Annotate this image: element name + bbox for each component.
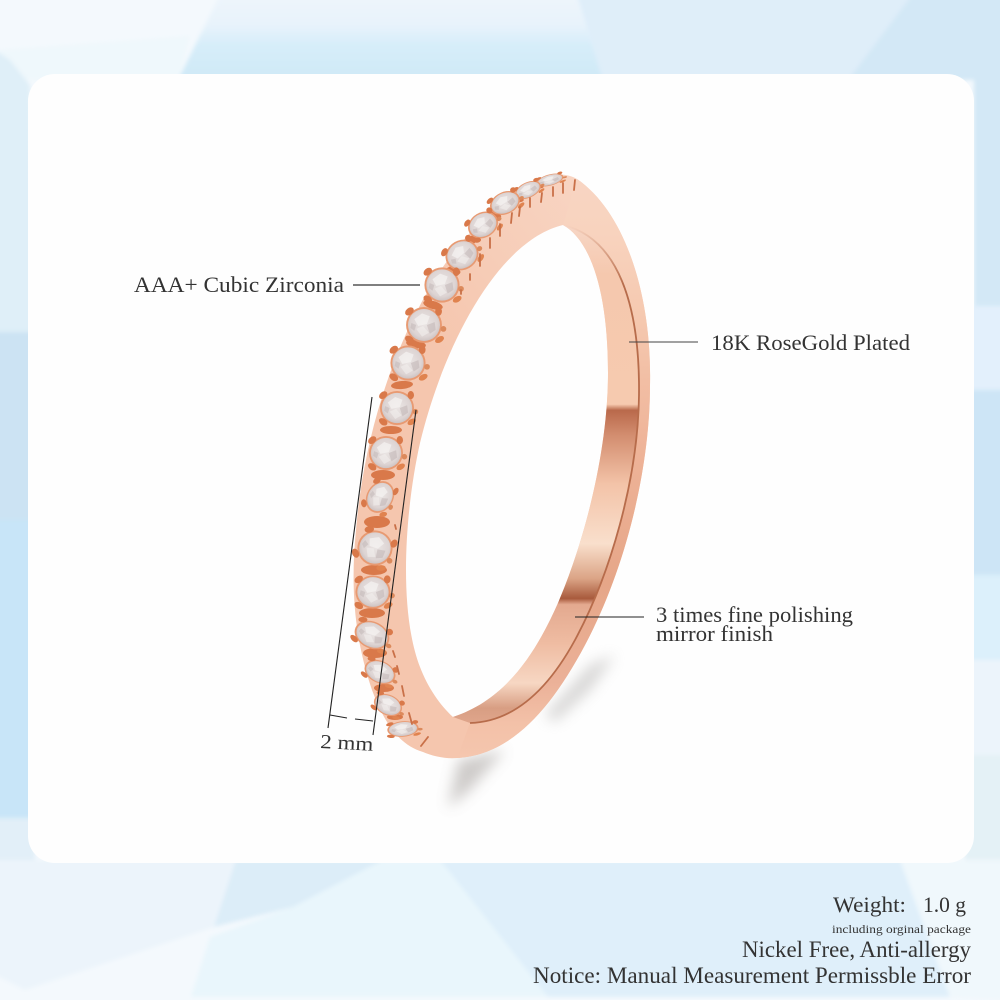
callout: mirror finish	[575, 602, 853, 646]
dimension: 2 mm width	[320, 397, 416, 756]
callout: mirror finish: mirror finish	[656, 621, 773, 646]
product notes: Weight:	[833, 892, 906, 917]
callout: cubic zirconia: AAA+ Cubic Zirconia	[134, 272, 344, 297]
ring inner face	[453, 225, 639, 723]
product notes: including orginal package	[832, 922, 971, 936]
dimension: 2 mm width: 2 mm	[320, 731, 374, 756]
product notes: 1.0 g	[923, 892, 966, 917]
ring inner edge line	[470, 225, 639, 723]
ring illustration	[347, 170, 650, 758]
panel: white card	[28, 74, 974, 863]
ring outer right edge	[457, 179, 650, 758]
stones	[347, 170, 568, 739]
product notes: Notice: Manual Measurement Permissble Error	[533, 963, 971, 988]
ring shadow	[448, 655, 615, 808]
copper settings between stones	[359, 181, 545, 720]
callout: rose gold plating: 18K RoseGold Plated	[711, 330, 910, 355]
product notes: Nickel Free, Anti-allergy	[742, 937, 971, 962]
product notes	[533, 892, 971, 988]
copper prongs	[393, 180, 575, 746]
callout: mirror finish: 3 times fine polishing	[656, 602, 853, 627]
ring body	[354, 175, 650, 758]
